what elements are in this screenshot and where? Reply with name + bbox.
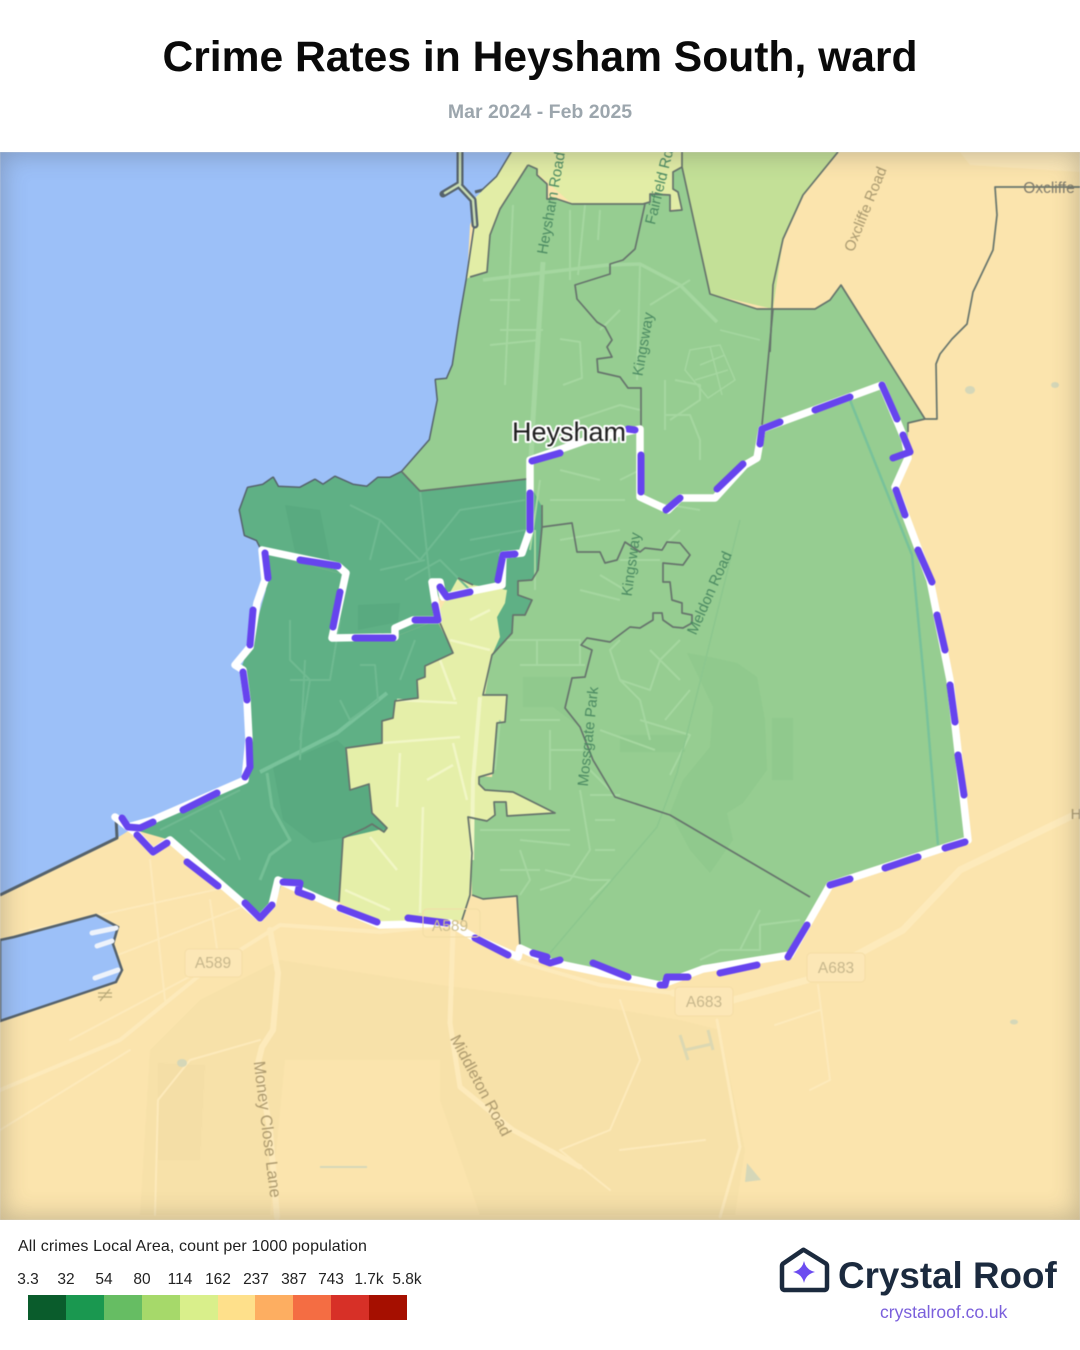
- label: Money Close Lane: Money Close Lane: [250, 1060, 284, 1199]
- label: Oxcliffe: Oxcliffe: [1023, 180, 1075, 197]
- icon: rail station symbol: [98, 989, 112, 1001]
- place label: Heysham: Heysham: [512, 417, 626, 447]
- area: dark green north west: [240, 472, 542, 655]
- legend colour scale: [28, 1295, 407, 1320]
- legend tick labels: 54: [95, 1271, 113, 1288]
- road badge A683 east: A683: [818, 960, 854, 977]
- road labels on land: [185, 165, 1080, 1199]
- legend tick labels: 32: [57, 1271, 75, 1288]
- area: darker patches of green: [523, 653, 793, 873]
- harbour basin: [0, 915, 122, 1021]
- road badge A589 partly hidden: A589: [432, 918, 468, 935]
- legend: [17, 1238, 422, 1320]
- road badge A683 south: [675, 987, 733, 1016]
- legend tick labels: [17, 1271, 422, 1288]
- land: grey ponds and spots: [177, 382, 1059, 1182]
- area: dark green south west: [135, 552, 453, 918]
- legend tick labels: 162: [205, 1271, 231, 1288]
- legend tick labels: 3.3: [17, 1271, 39, 1288]
- label: Oxcliffe Road: Oxcliffe Road: [841, 165, 891, 254]
- roads on the dark green: [160, 490, 525, 880]
- label: Kingsway south: Kingsway: [619, 531, 644, 597]
- map edge vignette: [0, 152, 1080, 1220]
- roads on pale centre: [345, 610, 490, 913]
- land: darker urban patches: [140, 152, 1080, 1215]
- legend tick labels: 237: [243, 1271, 269, 1288]
- breakwater: [443, 152, 475, 225]
- road badge A589: [185, 949, 242, 977]
- map panel: [0, 152, 1080, 1220]
- label: Mossgate Park: Mossgate Park: [575, 685, 602, 787]
- label: Heysham Road: Heysham Road: [534, 152, 569, 256]
- area: medium green ward and north: [402, 165, 968, 985]
- legend tick labels: 1.7k: [354, 1271, 384, 1288]
- legend title: All crimes Local Area, count per 1000 population: [18, 1238, 367, 1255]
- legend tick labels: 114: [168, 1271, 192, 1288]
- title: Crime Rates in Heysham South, ward: [162, 33, 918, 81]
- icon: house with star: [780, 1248, 830, 1292]
- label: Meldon Road: Meldon Road: [684, 549, 736, 637]
- harbour jetties: [92, 928, 118, 978]
- area: light green north east: [682, 152, 838, 309]
- label: Middleton Road: Middleton Road: [446, 1032, 514, 1139]
- legend tick labels: 387: [281, 1271, 307, 1288]
- sea: [0, 152, 512, 895]
- area boundary lines: [339, 152, 1080, 947]
- land background: [0, 152, 1080, 1220]
- road labels on green: [534, 148, 736, 787]
- website: crystalroof.co.uk: [880, 1302, 1007, 1322]
- land: road network: [0, 812, 1080, 1217]
- area: pale yellow-green centre: [339, 578, 555, 925]
- legend tick labels: 743: [318, 1271, 344, 1288]
- ward boundary: purple dashes: [122, 385, 965, 985]
- area: pale yellow-green north: [467, 152, 682, 279]
- coastline: [0, 152, 512, 895]
- legend tick labels: 5.8k: [392, 1271, 422, 1288]
- ward boundary: white outline: [115, 385, 968, 985]
- legend tick labels: 80: [133, 1271, 151, 1288]
- road badge A589: A589: [195, 955, 231, 972]
- area: darker tone on dark green: [273, 505, 400, 843]
- road badge A683 east: [807, 953, 865, 982]
- road badge A589 partly hidden: [423, 909, 480, 937]
- subtitle: date range: Mar 2024 - Feb 2025: [448, 101, 632, 123]
- logo wordmark: Crystal Roof: [838, 1255, 1057, 1296]
- roads on the medium green: [480, 205, 938, 960]
- logo: Crystal Roof: [780, 1248, 1057, 1322]
- road badge A683 south: A683: [686, 994, 722, 1011]
- label: Kingsway north: Kingsway: [630, 311, 658, 377]
